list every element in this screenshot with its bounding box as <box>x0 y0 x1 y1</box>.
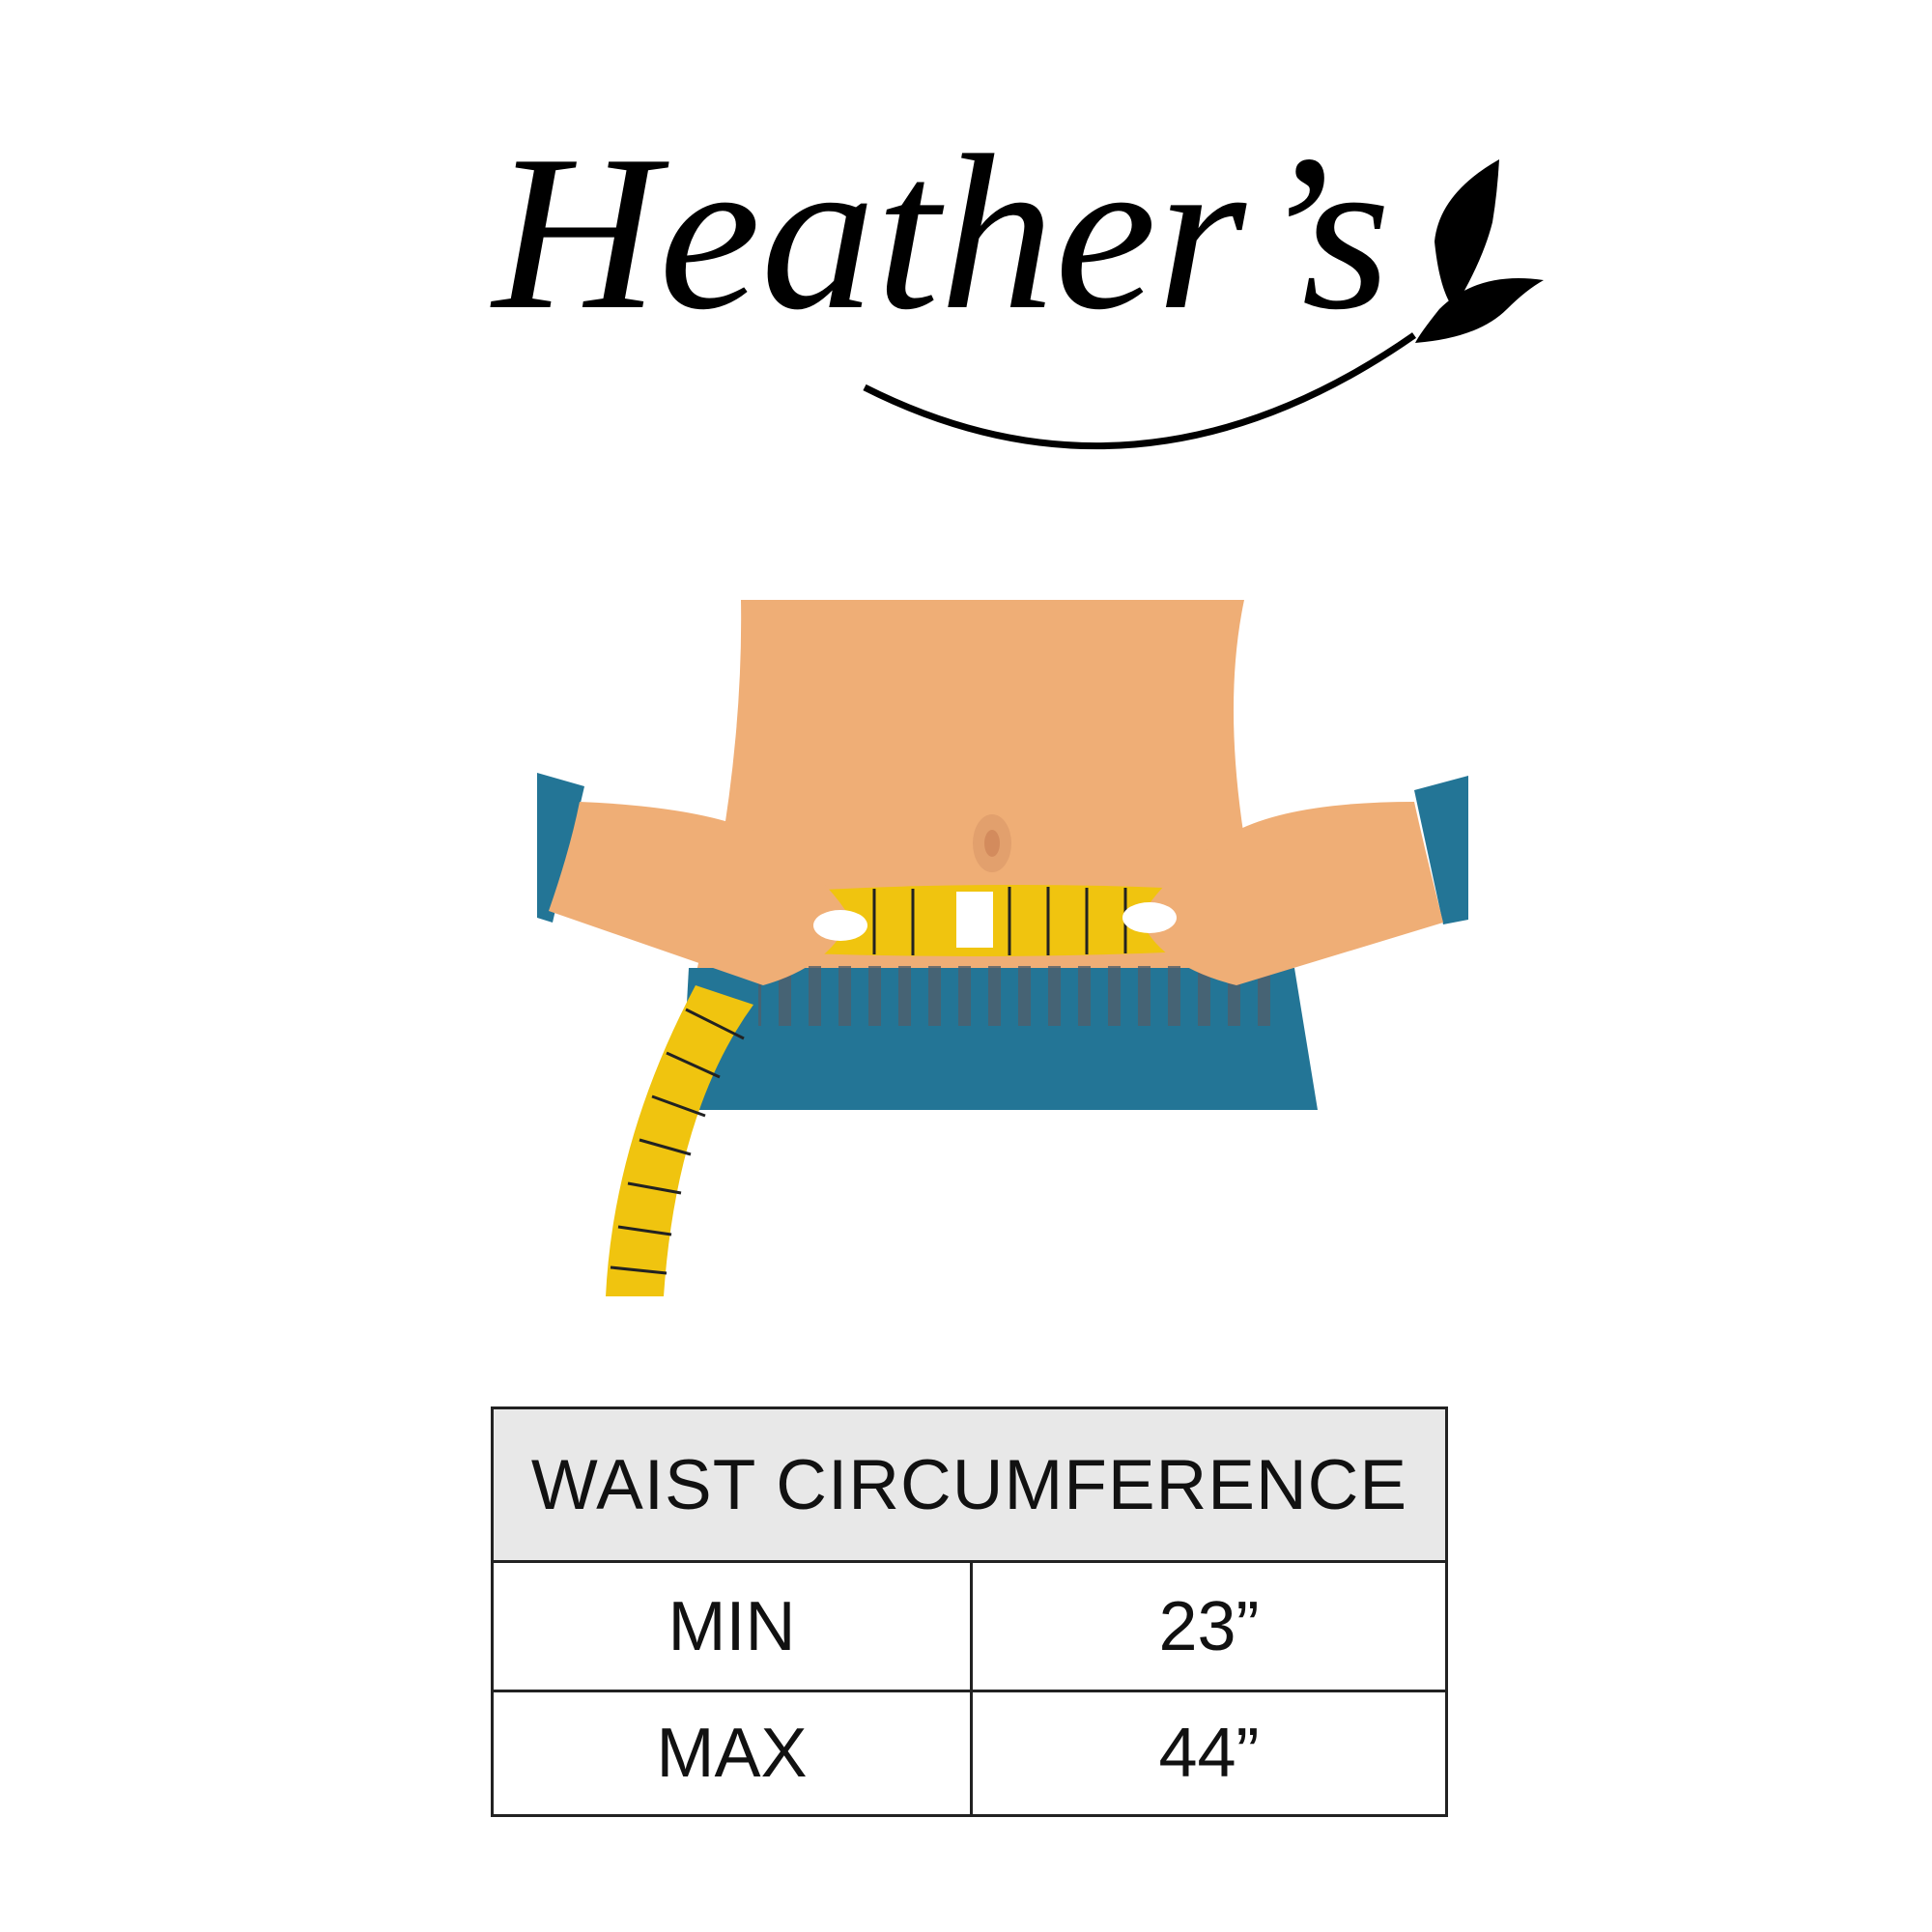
table header <box>494 1409 1445 1563</box>
left sleeve <box>537 773 584 923</box>
pants stitching <box>758 966 1280 1026</box>
row: max <box>656 1692 1260 1814</box>
torso <box>696 600 1275 976</box>
tape measure hanging <box>606 985 753 1296</box>
right hand <box>1140 802 1443 985</box>
logo <box>490 109 1544 450</box>
navel <box>973 814 1011 872</box>
row: max: 44” <box>1158 1715 1260 1792</box>
row: min: 23” <box>1158 1588 1260 1665</box>
logo swoosh <box>865 335 1414 446</box>
logo text: Heather’s <box>490 109 1391 355</box>
right sleeve <box>1414 776 1468 924</box>
row: min <box>494 1563 1445 1692</box>
pants <box>681 968 1318 1110</box>
table header: WAIST CIRCUMFERENCE <box>531 1445 1407 1524</box>
illustration: waist measuring <box>537 600 1468 1296</box>
table: waist circumference <box>491 1406 1448 1817</box>
left hand <box>549 802 850 985</box>
row: max: MAX <box>656 1715 808 1792</box>
tape measure horizontal <box>753 885 1188 956</box>
row: min: MIN <box>668 1588 795 1665</box>
icon: leaves <box>1415 159 1544 343</box>
